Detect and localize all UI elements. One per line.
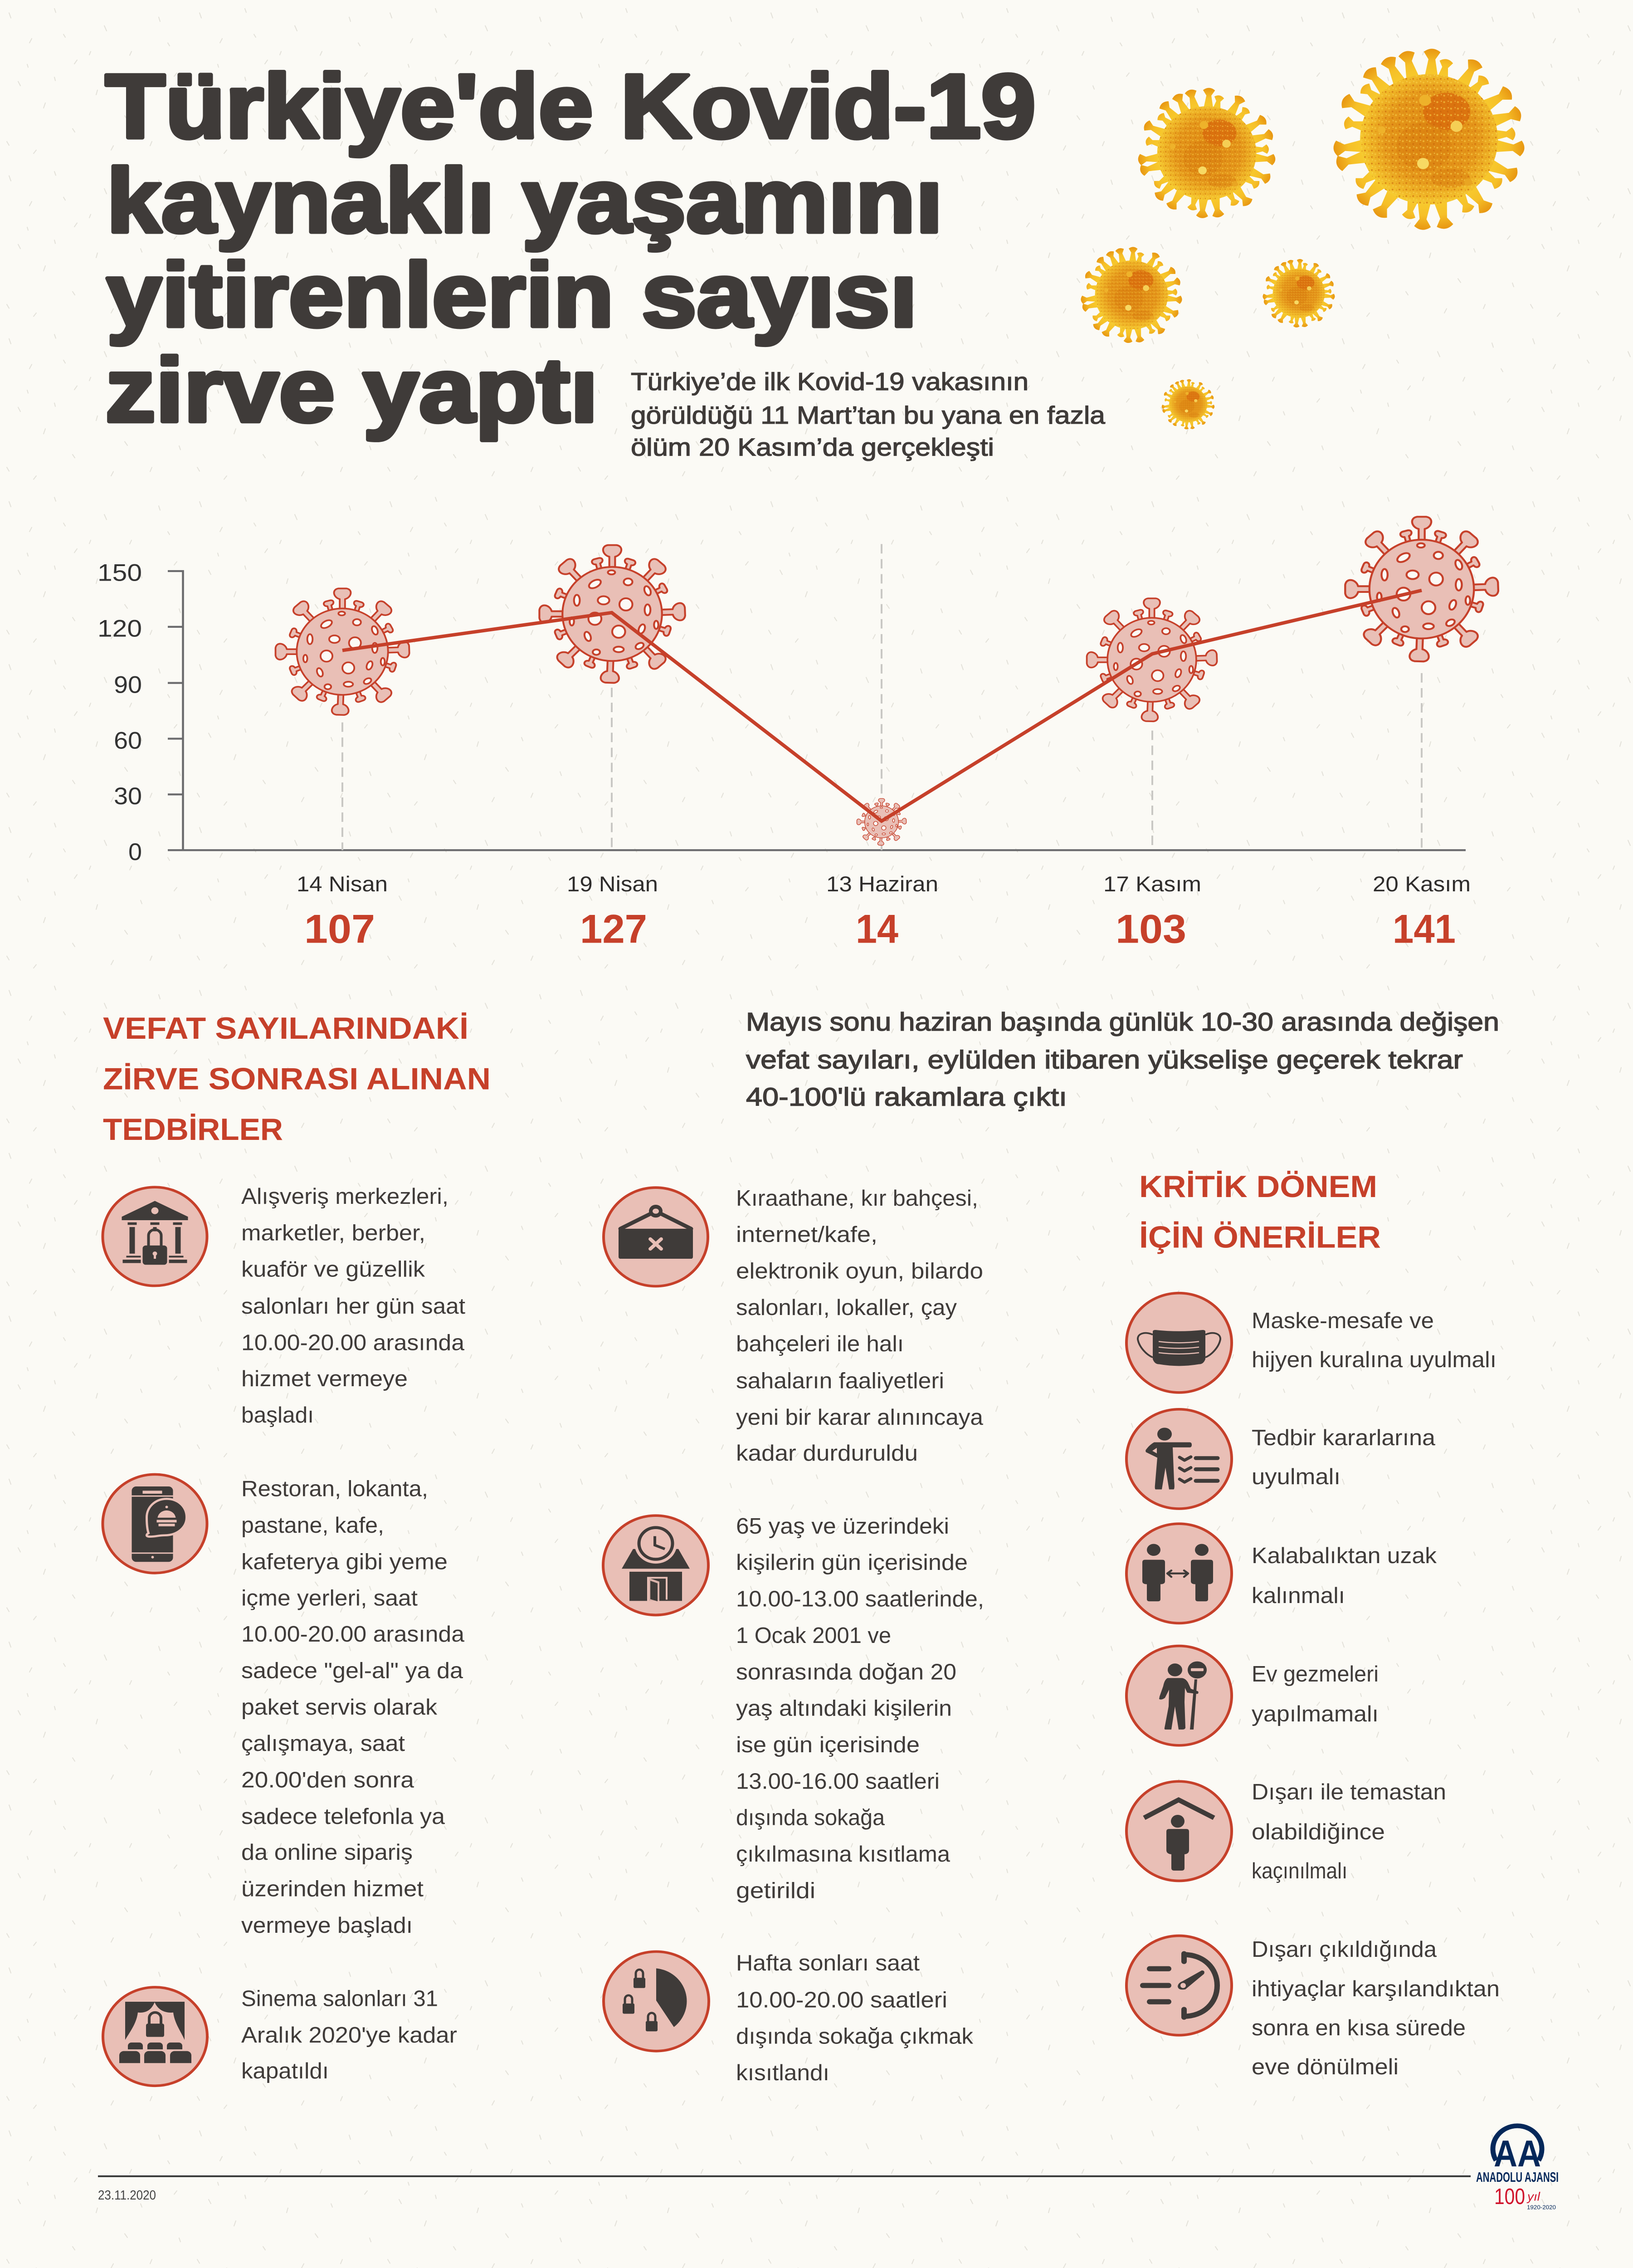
text: coffeehouses: salonları, lokaller, çay	[736, 1295, 957, 1320]
text: return home quickly: eve dönülmeli	[1252, 2054, 1399, 2079]
icon: closed sign	[604, 1188, 708, 1286]
text: restaurants: da online sipariş	[241, 1840, 413, 1865]
line chart	[97, 517, 1498, 952]
icon: pie with locks	[604, 1951, 709, 2051]
subtitle	[631, 368, 1106, 461]
date labels: 17 Kasım	[1103, 872, 1201, 896]
text: return home quickly: sonra en kısa sürede	[1252, 2015, 1466, 2040]
icon: two people distance	[1126, 1524, 1232, 1623]
title: zirve yaptı	[105, 339, 598, 441]
text: coffeehouses: kadar durduruldu	[736, 1441, 918, 1466]
text: curfew for age groups: 10.00-13.00 saatlerinde,	[736, 1586, 984, 1611]
text: return home quickly: Dışarı çıkıldığında	[1252, 1936, 1437, 1961]
icon: person with stop sign	[1126, 1646, 1232, 1745]
text: curfew for age groups: dışında sokağa	[736, 1805, 885, 1830]
text: weekends: 10.00-20.00 saatleri	[736, 1987, 947, 2012]
text: coffeehouses: elektronik oyun, bilardo	[736, 1258, 983, 1283]
paragraph: daily deaths: 40-100'lü rakamlara çıktı	[746, 1083, 1067, 1111]
text: avoid outside contact	[1252, 1779, 1446, 1883]
title	[105, 55, 1036, 441]
text: shopping centers: salonları her gün saat	[241, 1293, 465, 1319]
dashed guide lines	[342, 544, 1422, 850]
text: curfew for age groups: sonrasında doğan 20	[736, 1659, 956, 1684]
subtitle: Türkiye’de ilk Kovid-19 vakasının	[631, 368, 1029, 396]
paragraph: daily deaths: vefat sayıları, eylülden itibaren yükselişe geçerek tekrar	[746, 1046, 1463, 1074]
text: coffeehouses	[736, 1185, 984, 1466]
date labels: 14 Nisan	[297, 872, 388, 896]
logo: Anadolu Ajansi: yıl	[1526, 2190, 1540, 2203]
text: weekends: dışında sokağa çıkmak	[736, 2024, 974, 2048]
logo: Anadolu Ajansi: 100	[1494, 2184, 1525, 2209]
text: shopping centers: Alışveriş merkezleri,	[241, 1183, 448, 1209]
heading: recommendations: KRİTİK DÖNEM	[1139, 1169, 1377, 1204]
icon: house with clock	[603, 1515, 708, 1615]
logo: Anadolu Ajansi: ANADOLU AJANSI	[1476, 2170, 1559, 2185]
golden virus illustrations	[1080, 49, 1525, 430]
text: restaurants: kafeterya gibi yeme	[241, 1549, 448, 1574]
text: shopping centers	[241, 1183, 465, 1427]
text: home visits: Ev gezmeleri	[1252, 1661, 1379, 1686]
heading: measures: ZİRVE SONRASI ALINAN	[103, 1062, 491, 1096]
icon: phone food order	[102, 1474, 207, 1573]
text: crowds: Kalabalıktan uzak	[1252, 1543, 1437, 1568]
logo: Anadolu Ajansi: 1920-2020	[1527, 2204, 1556, 2210]
text: restaurants: üzerinden hizmet	[241, 1876, 424, 1901]
text: crowds: kalınmalı	[1252, 1583, 1345, 1608]
text: coffeehouses: sahaların faaliyetleri	[736, 1368, 944, 1393]
text: home visits: yapılmamalı	[1252, 1701, 1379, 1726]
icon: mask	[1126, 1293, 1232, 1393]
text: mask	[1252, 1308, 1497, 1372]
date labels: 19 Nisan	[567, 872, 658, 896]
logo: Anadolu Ajansi	[1476, 2126, 1559, 2210]
icon: person under roof	[1126, 1781, 1232, 1881]
virus markers	[276, 517, 1498, 846]
text: weekends: kısıtlandı	[736, 2060, 829, 2085]
death counts: 14	[856, 907, 898, 952]
text: crowds	[1252, 1543, 1437, 1608]
text: curfew for age groups: yaş altındaki kişilerin	[736, 1696, 952, 1721]
icon: closed cinema	[103, 1987, 207, 2086]
icon: closed bank with lock	[102, 1187, 207, 1286]
text: cinemas: Aralık 2020'ye kadar	[241, 2022, 457, 2048]
text: shopping centers: hizmet vermeye	[241, 1366, 408, 1391]
date labels: 20 Kasım	[1373, 872, 1471, 896]
y axis labels: 150	[97, 559, 142, 586]
text: curfew for age groups: kişilerin gün içerisinde	[736, 1550, 968, 1575]
text: weekends: Hafta sonları saat	[736, 1950, 920, 1975]
heading: recommendations: İÇİN ÖNERİLER	[1139, 1220, 1381, 1254]
title: Türkiye'de Kovid-19	[105, 55, 1036, 157]
y axis labels: 0	[128, 838, 142, 865]
title: kaynaklı yaşamını	[107, 150, 943, 251]
text: rules: uyulmalı	[1252, 1464, 1341, 1489]
text: rules: Tedbir kararlarına	[1252, 1425, 1436, 1450]
text: restaurants: içme yerleri, saat	[241, 1585, 418, 1610]
text: curfew for age groups: 1 Ocak 2001 ve	[736, 1623, 891, 1648]
date labels	[297, 872, 1471, 896]
text: restaurants: pastane, kafe,	[241, 1512, 384, 1538]
footer rule	[98, 2175, 1471, 2177]
text: avoid outside contact: kaçınılmalı	[1252, 1858, 1347, 1883]
text: shopping centers: kuaför ve güzellik	[241, 1256, 425, 1281]
text: restaurants: paket servis olarak	[241, 1694, 438, 1719]
text: curfew for age groups: 13.00-16.00 saatleri	[736, 1769, 940, 1794]
logo: Anadolu Ajansi: AA	[1494, 2132, 1541, 2174]
paragraph: daily deaths: Mayıs sonu haziran başında günlük 10-30 arasında değişen	[746, 1008, 1499, 1036]
heading: recommendations	[1139, 1169, 1381, 1254]
text: avoid outside contact: olabildiğince	[1252, 1819, 1385, 1844]
death counts	[304, 907, 1456, 952]
death counts: 103	[1116, 907, 1186, 952]
death counts: 141	[1393, 907, 1456, 952]
text: avoid outside contact: Dışarı ile temastan	[1252, 1779, 1446, 1804]
text: restaurants: 20.00'den sonra	[241, 1767, 414, 1792]
text: curfew for age groups: çıkılmasına kısıtlama	[736, 1841, 951, 1867]
text: coffeehouses: Kıraathane, kır bahçesi,	[736, 1185, 978, 1211]
text: restaurants: vermeye başladı	[241, 1912, 413, 1938]
text: restaurants: sadece "gel-al" ya da	[241, 1658, 463, 1683]
date labels: 13 Haziran	[826, 872, 938, 896]
text: home visits	[1252, 1661, 1379, 1726]
icon: fast clock	[1126, 1936, 1232, 2035]
text: restaurants: sadece telefonla ya	[241, 1804, 445, 1828]
text: restaurants: Restoran, lokanta,	[241, 1476, 428, 1501]
text: cinemas	[241, 1986, 457, 2083]
death counts: 127	[580, 907, 647, 952]
y axis labels: 120	[97, 615, 142, 642]
text: return home quickly: ihtiyaçlar karşılandıktan	[1252, 1976, 1500, 2001]
text: return home quickly	[1252, 1936, 1500, 2079]
y axis labels	[97, 559, 142, 865]
text: curfew for age groups: ise gün içerisinde	[736, 1732, 920, 1757]
axes	[168, 571, 1466, 850]
date: 23.11.2020	[98, 2188, 156, 2203]
text: restaurants: 10.00-20.00 arasında	[241, 1621, 465, 1647]
title: yitirenlerin sayısı	[107, 244, 917, 346]
text: mask: Maske-mesafe ve	[1252, 1308, 1434, 1333]
text: cinemas: Sinema salonları 31	[241, 1986, 438, 2011]
text: curfew for age groups	[736, 1513, 984, 1903]
icon: person with checklist	[1126, 1409, 1232, 1509]
subtitle: ölüm 20 Kasım’da gerçekleşti	[631, 433, 994, 461]
heading: measures	[103, 1011, 491, 1147]
text: shopping centers: marketler, berber,	[241, 1220, 425, 1245]
death counts: 107	[304, 907, 375, 952]
text: curfew for age groups: getirildi	[736, 1878, 815, 1903]
y axis labels: 30	[114, 783, 142, 810]
subtitle: görüldüğü 11 Mart’tan bu yana en fazla	[631, 401, 1106, 429]
text: weekends	[736, 1950, 974, 2085]
text: coffeehouses: bahçeleri ile halı	[736, 1331, 904, 1356]
heading: measures: VEFAT SAYILARINDAKİ	[103, 1011, 468, 1046]
y axis labels: 90	[114, 671, 142, 698]
heading: measures: TEDBİRLER	[103, 1112, 283, 1147]
y axis labels: 60	[114, 727, 142, 754]
data line	[342, 591, 1422, 821]
text: shopping centers: başladı	[241, 1402, 314, 1427]
text: mask: hijyen kuralına uyulmalı	[1252, 1347, 1497, 1372]
paragraph: daily deaths	[746, 1008, 1499, 1111]
text: restaurants	[241, 1476, 465, 1938]
text: coffeehouses: yeni bir karar alınıncaya	[736, 1404, 984, 1430]
text: restaurants: çalışmaya, saat	[241, 1730, 405, 1756]
text: curfew for age groups: 65 yaş ve üzerindeki	[736, 1513, 949, 1539]
text: shopping centers: 10.00-20.00 arasında	[241, 1330, 465, 1355]
text: coffeehouses: internet/kafe,	[736, 1222, 877, 1247]
text: rules	[1252, 1425, 1436, 1489]
text: cinemas: kapatıldı	[241, 2058, 329, 2083]
